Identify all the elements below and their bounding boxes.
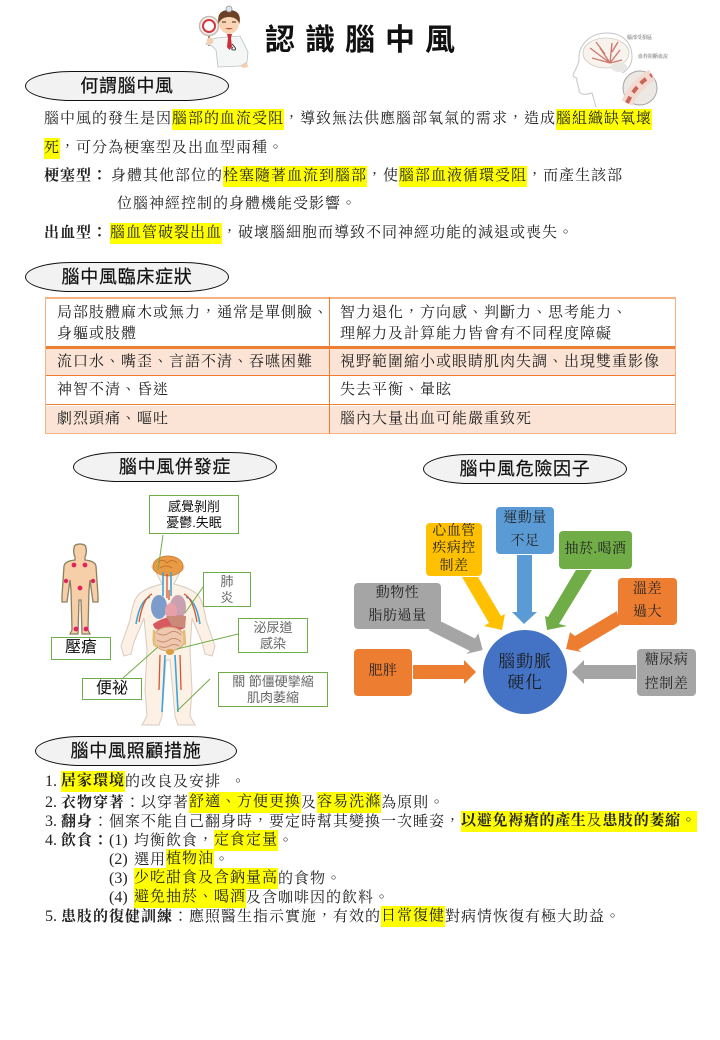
text block: stroke definition: 栓塞隨著血流到腦部 bbox=[223, 168, 367, 184]
heading: clinical symptoms bbox=[25, 262, 229, 292]
label: pneumonia bbox=[203, 572, 251, 607]
label: urinary tract infection: 感染 bbox=[260, 636, 286, 651]
risk box: animal fat excess bbox=[354, 583, 441, 629]
risk box: large temperature difference: 過大 bbox=[633, 605, 662, 620]
label: pressure sores bbox=[51, 637, 111, 660]
text block: care measures list: (1) bbox=[109, 832, 128, 849]
text block: care measures list: 容易洗滌 bbox=[317, 794, 381, 810]
heading: complications: 腦中風併發症 bbox=[119, 457, 231, 477]
risk box: poor diabetes control: 控制差 bbox=[645, 677, 688, 692]
label: sensory deprivation, depression, insomnia bbox=[149, 495, 239, 534]
table: clinical symptoms: 視野範圍縮小或眼睛肌肉失調、出現雙重影像 bbox=[340, 354, 660, 370]
table: clinical symptoms: 局部肢體麻木或無力，通常是單側臉、 bbox=[57, 305, 329, 321]
text block: care measures list: 以避免褥瘡的產生及患肢的萎縮。 bbox=[461, 813, 697, 829]
arrow: animal fat bbox=[428, 622, 483, 654]
table: clinical symptoms bbox=[45, 297, 676, 434]
table: clinical symptoms: 神智不清、昏迷 bbox=[57, 382, 169, 398]
label: joint stiffness and muscle atrophy: 關 節僵硬攣縮 bbox=[232, 674, 314, 689]
risk box: poor diabetes control: 糖尿病 bbox=[645, 653, 688, 668]
arrow: lack of exercise bbox=[512, 555, 537, 624]
table: clinical symptoms: 身軀或肢體 bbox=[57, 326, 137, 342]
icon: head and brain with blocked artery bbox=[572, 32, 668, 107]
text block: care measures list: 居家環境 bbox=[61, 773, 125, 789]
icon: doctor holding sign bbox=[198, 6, 248, 68]
arrow: obesity bbox=[413, 660, 476, 684]
text block: stroke definition: 腦血管破裂出血 bbox=[110, 225, 222, 241]
text block: care measures list: 2. bbox=[45, 794, 57, 811]
label: constipation bbox=[82, 678, 142, 700]
risk box: poor diabetes control bbox=[637, 649, 696, 696]
diagram: risk factor arrows bbox=[413, 555, 636, 684]
table: clinical symptoms: 流口水、嘴歪、言語不清、吞嚥困難 bbox=[57, 354, 313, 370]
centre circle: atherosclerosis: 腦動脈 bbox=[498, 652, 552, 671]
heading: what is stroke: 何謂腦中風 bbox=[80, 76, 174, 96]
text block: care measures list: (3) bbox=[109, 870, 128, 887]
text block: stroke definition: 腦部的血流受阻 bbox=[172, 111, 284, 127]
text block: care measures list: 及含咖啡因的飲料。 bbox=[246, 890, 390, 906]
table: clinical symptoms: 腦內大量出血可能嚴重致死 bbox=[340, 411, 532, 427]
text block: care measures list: 衣物穿著：以穿著 及 為原則。 bbox=[61, 795, 445, 811]
risk box: obesity bbox=[354, 649, 412, 696]
text block: stroke definition: 腦中風的發生是因 ，導致無法供應腦部氧氣的需求，造成 bbox=[44, 111, 556, 127]
label: urinary tract infection: 泌尿道 bbox=[253, 620, 292, 635]
label: pneumonia: 肺 bbox=[220, 574, 234, 589]
text block: care measures list: 4. bbox=[45, 832, 57, 849]
risk box: smoking and drinking bbox=[559, 531, 632, 569]
arrow: temperature difference bbox=[566, 611, 620, 652]
text block: care measures list: 患肢的復健訓練：應照醫生指示實施，有效的 對病情恢復有極大助益。 bbox=[61, 909, 621, 925]
text block: stroke definition: 梗塞型： bbox=[44, 168, 108, 184]
text block: care measures list: 選用 。 bbox=[134, 852, 230, 868]
risk box: poor cardiovascular control: 心血管 bbox=[432, 524, 476, 539]
risk box: obesity: 肥胖 bbox=[368, 664, 398, 679]
label: joint stiffness and muscle atrophy: 肌肉萎縮 bbox=[247, 690, 299, 705]
text block: care measures list: (4) bbox=[109, 889, 128, 906]
heading: what is stroke bbox=[25, 71, 229, 101]
text block: care measures list: 1. bbox=[45, 773, 57, 790]
text block: stroke definition: 腦組織缺氧壞 bbox=[556, 111, 652, 127]
text block: care measures list: 舒適、方便更換 bbox=[189, 794, 301, 810]
table: clinical symptoms: 智力退化，方向感、判斷力、思考能力、 bbox=[340, 305, 628, 321]
label: constipation: 便祕 bbox=[96, 680, 128, 697]
label: sensory deprivation, depression, insomnia: 感覺剝削 bbox=[168, 499, 220, 514]
figure: front view body with organs bbox=[121, 556, 215, 725]
text block: stroke definition: 腦部血液循環受阻 bbox=[399, 168, 527, 184]
text block: care measures list: 避免抽菸、喝酒 bbox=[134, 889, 246, 905]
risk box: lack of exercise bbox=[496, 507, 554, 554]
text block: care measures list: 日常復健 bbox=[381, 908, 445, 924]
table: clinical symptoms: 理解力及計算能力皆會有不同程度障礙 bbox=[340, 326, 612, 342]
arrow: smoking and drinking bbox=[545, 570, 592, 630]
icon: head and brain with blocked artery: 腦部受損區 bbox=[627, 34, 652, 41]
leader line: constipation bbox=[123, 647, 158, 678]
risk box: animal fat excess: 脂肪過量 bbox=[368, 609, 426, 624]
risk box: poor cardiovascular control bbox=[426, 523, 482, 576]
heading: care measures: 腦中風照顧措施 bbox=[71, 741, 201, 761]
arrow: cardiovascular disease bbox=[462, 577, 505, 630]
centre circle: atherosclerosis: 硬化 bbox=[507, 673, 543, 692]
text block: care measures list: 5. bbox=[45, 908, 57, 925]
heading: risk factors bbox=[423, 454, 627, 484]
text block: stroke definition: ，可分為梗塞型及出血型兩種。 bbox=[60, 140, 284, 156]
leader line: urinary infection bbox=[177, 634, 238, 649]
text block: care measures list: (2) bbox=[109, 851, 128, 868]
text block: stroke definition: 身體其他部位的 ，使 ，而產生該部 bbox=[111, 168, 623, 184]
label: pneumonia: 炎 bbox=[220, 590, 234, 605]
title: 認識腦中風 bbox=[265, 24, 465, 57]
label: joint stiffness and muscle atrophy bbox=[218, 672, 328, 707]
risk box: large temperature difference: 溫差 bbox=[633, 582, 662, 597]
text block: care measures list: 的改良及安排 。 bbox=[125, 774, 247, 790]
label: pressure sores: 壓瘡 bbox=[65, 639, 97, 656]
risk box: smoking and drinking: 抽菸.喝酒 bbox=[564, 542, 626, 557]
table: clinical symptoms: 失去平衡、暈眩 bbox=[340, 382, 452, 398]
text block: stroke definition: 位腦神經控制的身體機能受影響。 bbox=[117, 196, 357, 212]
text block: care measures list: 的食物。 bbox=[278, 871, 342, 887]
icon: head and brain with blocked artery: 血栓阻斷血流 bbox=[638, 53, 668, 60]
text block: stroke definition bbox=[44, 109, 652, 244]
risk box: large temperature difference bbox=[618, 578, 677, 625]
risk box: poor cardiovascular control: 疾病控 bbox=[432, 541, 476, 556]
text block: care measures list bbox=[45, 771, 697, 927]
text block: stroke definition: 出血型： bbox=[44, 225, 108, 241]
leader line: joint stiffness bbox=[177, 679, 210, 711]
text block: care measures list: 定食定量 bbox=[214, 832, 278, 848]
table: clinical symptoms: 劇烈頭痛、嘔吐 bbox=[57, 411, 169, 427]
heading: complications bbox=[73, 452, 277, 482]
leader line: pneumonia bbox=[185, 587, 203, 613]
text block: care measures list: 少吃甜食及含鈉量高 bbox=[134, 870, 278, 886]
heading: risk factors: 腦中風危險因子 bbox=[460, 459, 590, 479]
text block: care measures list: 植物油 bbox=[166, 851, 214, 867]
risk box: animal fat excess: 動物性 bbox=[376, 586, 419, 601]
text block: care measures list: 飲食： 均衡飲食， 。 bbox=[61, 833, 294, 849]
heading: clinical symptoms: 腦中風臨床症狀 bbox=[62, 267, 192, 287]
centre circle: atherosclerosis bbox=[483, 630, 567, 714]
risk box: lack of exercise: 不足 bbox=[510, 534, 540, 549]
diagram: complications body figures bbox=[61, 535, 238, 726]
risk box: lack of exercise: 運動量 bbox=[503, 511, 547, 526]
heading: care measures bbox=[35, 736, 237, 766]
text block: care measures list: 3. bbox=[45, 813, 57, 830]
risk box: poor cardiovascular control: 制差 bbox=[440, 559, 468, 574]
text block: stroke definition: 死 bbox=[44, 140, 60, 156]
leader line: sensory deprivation bbox=[158, 535, 163, 570]
figure: back view body with pressure sores bbox=[62, 544, 98, 634]
text block: care measures list: 翻身：個案不能自己翻身時，要定時幫其變換一次睡姿， bbox=[61, 814, 461, 830]
label: sensory deprivation, depression, insomnia: 憂鬱.失眠 bbox=[166, 515, 222, 530]
text block: stroke definition: ，破壞腦細胞而導致不同神經功能的減退或喪失。 bbox=[222, 225, 574, 241]
label: urinary tract infection bbox=[238, 618, 308, 653]
arrow: diabetes bbox=[572, 660, 636, 684]
